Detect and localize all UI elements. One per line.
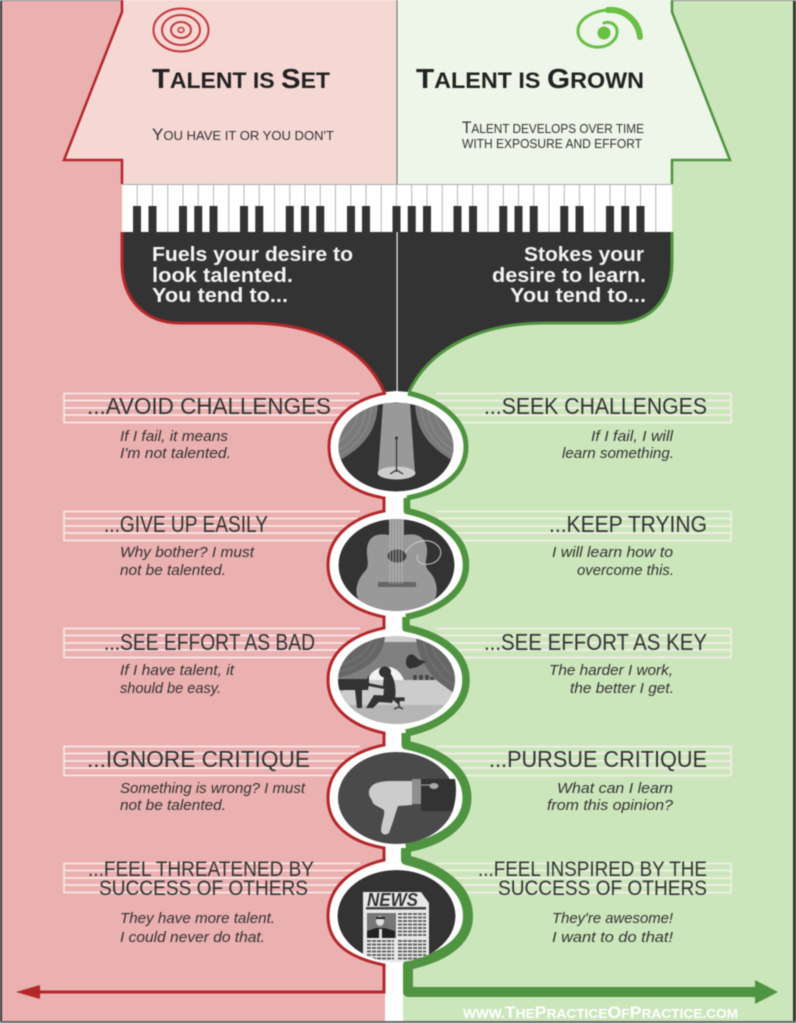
white spine [328,391,464,1021]
row 4 right [489,746,707,814]
text: stokes your desire: desire to learn. [492,265,646,287]
background: right green half [398,0,796,1023]
row 4 right: from this opinion? [547,797,674,814]
row 1 left: If I fail, it means [120,428,229,445]
row 1 right: ...SEEK CHALLENGES [484,393,707,419]
staff lines: row 4 [64,746,731,776]
illustration: pianist on stage [338,632,455,725]
text: talent develops over time: WITH EXPOSURE AND EFFORT [462,136,642,151]
row 1 left: ...AVOID CHALLENGES [87,393,331,419]
newspaper headline: NEWS [367,890,418,910]
row 1 right: If I fail, I will [591,428,674,445]
piano keyboard [122,184,672,232]
background: left red half [0,0,398,1023]
row 5 right: I want to do that! [552,929,674,946]
row 5 right: ...FEEL INSPIRED BY THE [478,858,707,881]
row 2 right: I will learn how to [552,544,673,561]
funnel outline: right [408,232,672,394]
row 4 left [87,746,310,814]
row 1 right [484,393,707,462]
row 5 right: SUCCESS OF OTHERS [498,877,707,900]
staff lines: row 3 [64,628,731,658]
text: fuels your desire [152,244,353,307]
icon: growth spiral [578,10,640,47]
text: talent develops over time: TALENT DEVELOPS OVER TIME [462,118,644,137]
dark funnel panel [122,232,672,394]
head outline: right [672,0,730,184]
funnel center line [396,232,398,394]
row 2 left: not be talented. [120,562,226,579]
row 2 left: Why bother? I must [120,544,255,561]
head outline: left [64,0,122,184]
text: you have it or you don't: YOU HAVE IT OR YOU DON'T [152,125,334,144]
row 5 left: SUCCESS OF OTHERS [99,877,308,900]
heading: talent is grown: TALENT IS GROWN [416,63,644,94]
row 3 left: should be easy. [120,680,221,697]
staff lines: row 1 [64,394,731,422]
green spine path and right arrow [406,393,778,1004]
row 5 left: ...FEEL THREATENED BY [88,858,314,881]
head: right panel [397,0,730,184]
heading: talent is set: TALENT IS SET [152,63,331,94]
row 4 left: ...IGNORE CRITIQUE [87,746,310,772]
footer url: WWW.THEPRACTICEOFPRACTICE.COM [463,1003,738,1022]
row 2 left: ...GIVE UP EASILY [104,511,268,537]
staff lines: row 2 [64,512,731,540]
illustration: newspaper [338,870,456,965]
row 3 right: The harder I work, [549,662,673,679]
text: stokes your desire: Stokes your [524,244,644,266]
icon: target [154,8,208,52]
row 5 right [478,858,707,946]
row 5 left: I could never do that. [120,929,265,946]
row 4 right: What can I learn [557,780,673,797]
row 3 right: ...SEE EFFORT AS KEY [484,629,707,655]
text: stokes your desire [492,244,646,307]
row 3 left: ...SEE EFFORT AS BAD [104,629,315,655]
row 4 right: ...PURSUE CRITIQUE [489,746,707,772]
center white strip [385,960,403,1021]
illustration: guitar [338,519,454,612]
row 5 right: They're awesome! [552,910,674,927]
row 3 right [484,629,707,697]
row 2 left [104,511,268,579]
head: left panel [64,0,397,184]
row 1 left: I'm not talented. [120,445,231,462]
illustration: thumbs down [338,752,456,844]
staff lines: row 5 [64,864,731,892]
row 3 right: the better I get. [570,680,674,697]
text: fuels your desire: look talented. [152,265,293,287]
row 2 right: ...KEEP TRYING [549,511,707,537]
text: talent develops over time [462,118,644,151]
text: stokes your desire: You tend to... [510,285,646,307]
illustration: spotlight stage [335,400,457,492]
row 5 left: They have more talent. [120,910,275,927]
row 1 right: learn something. [562,445,674,462]
row 3 left: If I have talent, it [120,662,235,679]
center divider [396,0,398,184]
red spine path and left arrow [16,393,386,999]
row 1 left [87,393,331,462]
row 2 right [549,511,707,579]
row 4 left: Something is wrong? I must [120,780,306,797]
row 5 left [88,858,314,946]
row 3 left [104,629,315,697]
text: fuels your desire: Fuels your desire to [152,244,353,266]
row 4 left: not be talented. [120,797,226,814]
funnel outline: left [122,232,385,394]
text: fuels your desire: You tend to... [152,285,288,307]
row 2 right: overcome this. [577,562,674,579]
